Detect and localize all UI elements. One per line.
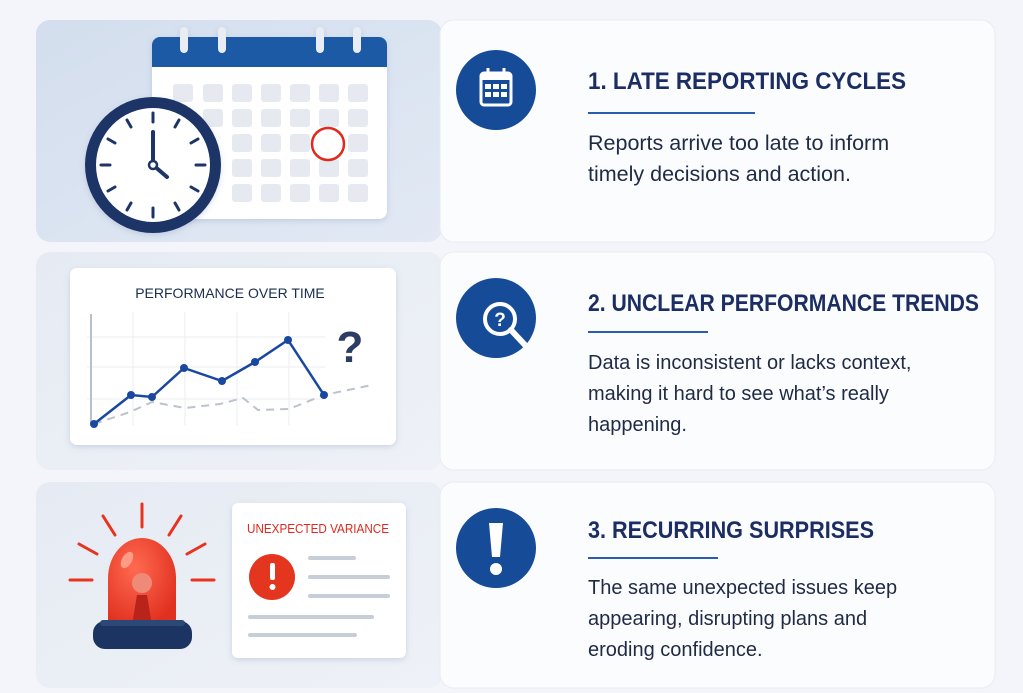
panel: row 1 late reporting xyxy=(36,20,995,242)
icon: calendar circle badge xyxy=(456,50,536,130)
icon: clock xyxy=(85,97,221,233)
chart: performance over time: PERFORMANCE OVER TIME xyxy=(135,285,325,301)
card: unexpected variance: UNEXPECTED VARIANCE xyxy=(247,521,389,536)
text: description 2: Data is inconsistent or lacks context, xyxy=(588,352,911,374)
text: description 1: timely decisions and action. xyxy=(588,162,851,186)
panel: row 3 recurring surprises xyxy=(36,482,995,688)
icon: calendar xyxy=(152,27,387,219)
heading: recurring surprises: 3. RECURRING SURPRISES xyxy=(588,517,874,544)
text: description 3: appearing, disrupting plans and xyxy=(588,608,867,630)
heading: late reporting cycles: 1. LATE REPORTING CYCLES xyxy=(588,68,906,95)
chart: performance over time xyxy=(70,268,396,445)
text: description 3: The same unexpected issues keep xyxy=(588,577,897,599)
text: description 1: Reports arrive too late to inform xyxy=(588,131,889,155)
text: description 2: happening. xyxy=(588,414,687,436)
text: description 2: making it hard to see what’s really xyxy=(588,383,889,405)
icon: magnifier badge xyxy=(456,278,536,358)
icon: magnifier badge: ? xyxy=(494,310,506,331)
card: unexpected variance xyxy=(232,503,406,658)
chart: performance over time: ? xyxy=(337,323,363,372)
icon: exclamation badge xyxy=(456,508,536,588)
panel: row 2 unclear trends xyxy=(36,252,995,470)
heading: unclear performance trends: 2. UNCLEAR PERFORMANCE TRENDS xyxy=(588,290,979,317)
icon: siren xyxy=(70,504,214,649)
text: description 3: eroding confidence. xyxy=(588,639,763,661)
